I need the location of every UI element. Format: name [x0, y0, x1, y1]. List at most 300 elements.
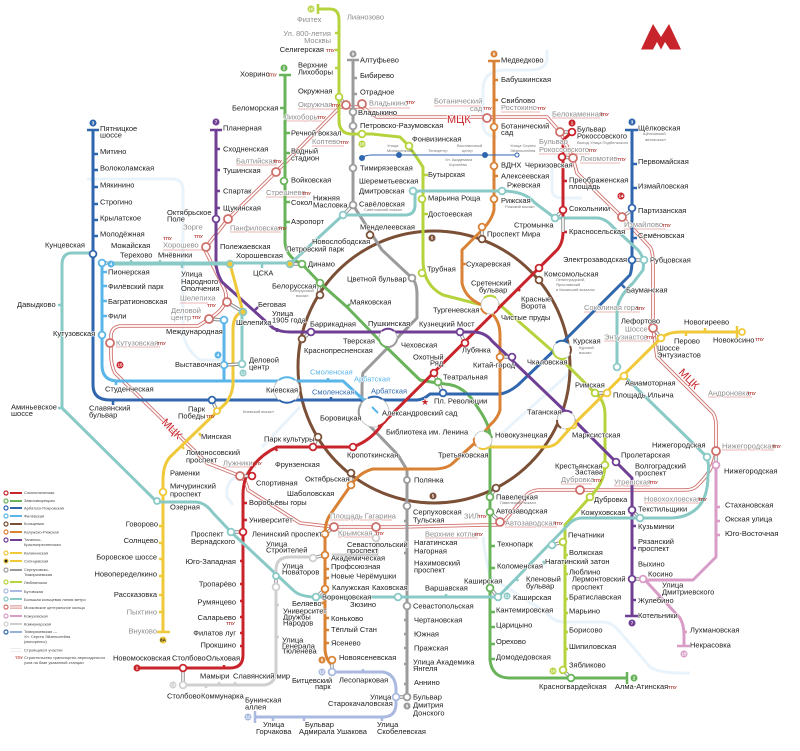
station labels left aligned: Бутырская	[428, 170, 465, 179]
station labels left aligned: Кантемировская	[496, 606, 553, 614]
line number bullets: 1	[571, 120, 574, 126]
station labels left aligned: Серпуховская	[413, 508, 462, 516]
station labels left aligned: Октябрьская	[305, 474, 350, 484]
station labels left aligned: Проспект Мира	[487, 230, 541, 238]
station labels left aligned: Столбово	[172, 654, 206, 662]
right aligned station labels: Говорово	[126, 520, 158, 528]
line number bullets: 11	[505, 594, 510, 598]
planned and MCC grey labels: Соколиная гора	[584, 303, 640, 312]
planned and MCC grey labels: Внуково	[128, 626, 157, 636]
station labels left aligned: ЦСКА	[253, 268, 273, 278]
planned and MCC grey labels	[116, 12, 776, 636]
station labels left aligned: бульвар	[479, 286, 507, 294]
station labels left aligned: Китай-город	[473, 360, 516, 370]
station labels left aligned: Комсомольская	[544, 270, 599, 278]
station labels left aligned: Свиблово	[501, 96, 535, 105]
station labels left aligned: Люблино	[569, 568, 600, 576]
interchange connectors	[102, 97, 716, 697]
legend: Солнцевская	[24, 558, 48, 564]
station labels left aligned: сад	[501, 128, 514, 137]
planned and MCC grey labels: Рокоссовского	[539, 145, 589, 154]
TPU transfer hub markers: ТПУ	[483, 106, 492, 111]
TPU transfer hub markers: ТПУ	[268, 72, 277, 78]
line number bullets: 4	[217, 352, 220, 358]
station labels left aligned: Полежаевская	[220, 242, 271, 251]
small station notes: railway terminals and monorail stops: Ленинградский,	[556, 277, 585, 282]
station labels left aligned: Ховрино	[240, 70, 270, 78]
line 10: Lyublinsko-Dmitrovskaya	[318, 4, 605, 670]
TPU transfer hub markers: ТПУ	[253, 461, 262, 466]
station labels left aligned: Савёловская	[359, 200, 405, 208]
station labels left aligned: Каширская	[513, 593, 551, 602]
station labels left aligned: Лухмановская	[690, 626, 739, 634]
station labels left aligned: Кунцевская	[45, 240, 85, 250]
station labels left aligned: Победы	[178, 412, 206, 420]
planned and MCC grey labels: Новохохловская	[644, 494, 701, 504]
line number bullets: 14	[618, 194, 624, 198]
TPU transfer hub markers: ТПУ	[747, 391, 756, 396]
station labels left aligned: Дмитриевского	[662, 588, 714, 596]
station labels left aligned: Университет	[249, 516, 293, 524]
line 11: Big Circle Line	[58, 191, 709, 600]
station labels left aligned: Волгоградский	[635, 462, 686, 470]
planned and MCC grey labels: Коптево	[312, 137, 340, 146]
station labels left aligned: Ольховая	[206, 654, 240, 662]
legend: Строительство транспортно-пересадочного	[24, 655, 106, 660]
station labels left aligned: Генерала	[282, 642, 316, 650]
station labels left aligned: Пражская	[414, 644, 448, 652]
line number bullets: 7	[215, 120, 218, 124]
station labels left aligned: Коломенская	[497, 562, 543, 570]
station labels left aligned: Красные	[521, 294, 551, 304]
station labels left aligned: Новоясеневская	[339, 653, 396, 662]
station labels left aligned: Щёлковская	[638, 124, 680, 132]
station labels left aligned: Киевская	[266, 386, 298, 394]
line number bullets: 6	[493, 52, 496, 56]
station labels left aligned: Зябликово	[569, 660, 606, 670]
legend: Люблинская	[24, 580, 47, 585]
station labels left aligned: Маяковская	[350, 298, 391, 306]
station labels left aligned: аллея	[245, 702, 266, 712]
station labels left aligned: Озерная	[170, 502, 200, 512]
line number bullets: 15	[681, 652, 687, 656]
station labels left aligned: Сухаревская	[466, 260, 511, 268]
station labels left aligned: центр	[249, 362, 269, 372]
station labels left aligned: Измайловская	[638, 182, 688, 190]
planned and MCC grey labels: Кутузовская	[116, 338, 158, 348]
line 9: Serpukhovsko-Timiryazevskaya	[347, 60, 417, 697]
planned and MCC grey labels: Бульвар	[539, 137, 568, 146]
planned and MCC grey labels: Лихоборы	[284, 112, 319, 122]
station labels left aligned: Сокольники	[569, 204, 610, 213]
station labels left aligned: Жулебино	[638, 596, 674, 605]
station labels left aligned: Нахимовский	[414, 558, 460, 568]
station labels left aligned: Улица	[370, 692, 392, 702]
station labels left aligned: Улица	[282, 636, 304, 644]
station labels left aligned: Деловой	[249, 356, 279, 364]
station labels left aligned: Лефортово	[621, 316, 660, 326]
station labels left aligned: Нижняя	[313, 194, 340, 202]
station labels left aligned: Кузьминки	[638, 522, 674, 531]
station labels left aligned: Тёплый Стан	[331, 625, 377, 634]
station labels left aligned: Войковская	[291, 176, 331, 184]
station labels left aligned: Донского	[413, 708, 445, 718]
station labels left aligned: Каширская	[464, 576, 502, 586]
line 3: Arbatsko-Pokrovskaya	[87, 130, 638, 405]
station labels left aligned: Верхние	[298, 60, 328, 70]
station labels left aligned: Окская улица	[725, 514, 773, 524]
station labels left aligned: Нагатинский затон	[545, 557, 610, 566]
legend: (монорельс)	[24, 639, 47, 644]
planned and MCC grey labels: Панфиловская	[230, 224, 282, 232]
station labels left aligned: Можайская	[111, 241, 150, 250]
station labels left aligned: Бибирево	[360, 71, 394, 80]
station labels left aligned: Шоссе	[657, 344, 680, 352]
station labels left aligned: Тульская	[413, 516, 444, 524]
station labels left aligned: Раменки	[170, 468, 200, 478]
station labels left aligned: Кропоткинская	[347, 450, 398, 460]
TPU transfer hub markers: ТПУ	[755, 337, 764, 342]
line 2: Zamoskvoretskaya	[279, 75, 627, 684]
planned and MCC grey labels: Энтузиастов	[604, 332, 648, 342]
small station notes: railway terminals and monorail stops: Киевский вокзал	[243, 409, 274, 414]
station labels left aligned: Беляево	[292, 599, 322, 608]
TPU transfer hub markers: ТПУ	[600, 112, 609, 117]
station labels left aligned: Владыкино	[358, 108, 397, 117]
station labels left aligned: Скобелевская	[377, 727, 426, 736]
right aligned station labels: Филатов луг	[193, 628, 236, 638]
station labels left aligned: Спортивная	[256, 478, 298, 488]
station labels left aligned: Чертановская	[414, 616, 462, 624]
station labels left aligned: Фонвизинская	[412, 134, 461, 144]
right aligned station labels	[94, 45, 324, 650]
small station notes: railway terminals and monorail stops: вокзал	[296, 293, 309, 298]
station labels left aligned: Дружбы	[283, 612, 311, 622]
legend: Кожуховская	[24, 614, 48, 618]
station labels left aligned: бульвар	[526, 582, 554, 590]
station labels left aligned: Полянка	[414, 476, 444, 484]
legend: ТПУ	[15, 655, 23, 660]
station labels left aligned: Славянский	[89, 404, 130, 412]
line 8A: Solntsevskaya	[156, 264, 243, 632]
TPU transfer hub markers: ТПУ	[478, 514, 487, 519]
planned and MCC grey labels: Шелепиха	[180, 294, 216, 302]
station labels left aligned: Бульвар	[413, 692, 442, 702]
MCC line lettering: МЦК	[159, 417, 185, 442]
station labels left aligned: Мнёвники	[158, 250, 192, 260]
TPU transfer hub markers: ТПУ	[537, 106, 546, 111]
station labels left aligned: Шаболовская	[287, 489, 334, 498]
TPU transfer hub markers: ТПУ	[317, 115, 326, 120]
station labels left aligned: Новокузнецкая	[495, 430, 548, 440]
small station notes: railway terminals and monorail stops: Выставочный	[457, 143, 482, 148]
TPU transfer hub markers: ТПУ	[192, 315, 201, 320]
TPU transfer hub markers	[157, 48, 781, 690]
line number bullets: 10	[308, 6, 314, 12]
station labels left aligned: Марьина Роща	[428, 194, 481, 202]
station labels left aligned: Волжская	[569, 548, 603, 557]
station labels left aligned: Выхино	[638, 560, 665, 568]
TPU transfer hub markers: ТПУ	[226, 621, 235, 626]
station labels left aligned: Нагорная	[414, 546, 447, 556]
station labels left aligned: Минская	[201, 432, 231, 441]
station labels left aligned: Пл. Революции	[434, 396, 487, 406]
small station notes: railway terminals and monorail stops	[243, 131, 666, 505]
MCC line lettering: МЦК	[447, 114, 471, 126]
station labels left aligned: Петровский парк	[286, 244, 345, 254]
station labels left aligned: Рокоссовского	[577, 132, 627, 140]
station labels left aligned: Красносельская	[569, 227, 625, 236]
station labels left aligned: Новаторов	[282, 568, 319, 576]
planned and MCC grey labels: Хорошево	[163, 240, 199, 250]
station labels left aligned: Вернадского	[191, 537, 235, 546]
station labels left aligned: Фили	[108, 312, 126, 320]
planned construction corridors	[87, 50, 690, 673]
station labels left aligned: площадь	[569, 182, 600, 191]
line number bullets: 9	[406, 704, 409, 708]
station labels left aligned: Народов	[283, 618, 313, 628]
TPU transfer hub markers: ТПУ	[194, 234, 203, 239]
planned and MCC grey labels: Лужники	[223, 458, 253, 468]
planned and MCC grey labels: Зорге	[183, 222, 203, 232]
line number bullets: 3	[92, 120, 95, 126]
small station notes: railway terminals and monorail stops: Белорусский	[290, 288, 314, 293]
station labels left aligned: Текстильщики	[638, 504, 687, 514]
planned and MCC grey labels: Деловой	[171, 306, 201, 315]
TPU transfer hub markers: ТПУ	[554, 521, 563, 526]
station labels left aligned: Отрадное	[360, 88, 394, 96]
station labels left aligned: Горчакова	[256, 727, 292, 736]
station labels left aligned: Ржевская	[507, 180, 541, 190]
small station notes: railway terminals and monorail stops: Павелецкий вокзал	[500, 500, 537, 505]
planned and MCC grey labels: Ботанический	[434, 96, 482, 106]
small station notes: railway terminals and monorail stops: Королёва	[449, 162, 468, 167]
station labels left aligned: Ломоносовский	[186, 448, 240, 457]
station labels left aligned: Старокачаловская	[328, 699, 393, 708]
line 13: Kommunarskaya	[183, 538, 377, 688]
legend: Арбатско-Покровская	[24, 506, 64, 510]
station labels left aligned: Сокол	[291, 198, 312, 207]
station labels left aligned: Царицыно	[496, 620, 532, 630]
legend: Большая кольцевая линия метро	[24, 597, 86, 602]
station labels left aligned: Орехово	[496, 637, 526, 646]
station labels left aligned: Пролетарская	[621, 450, 670, 460]
station labels left aligned: Площадь Ильича	[613, 390, 675, 400]
station labels left aligned: Динамо	[308, 260, 335, 268]
station labels left aligned: Тушинская	[223, 166, 261, 175]
station labels left aligned: Бунинская	[245, 696, 281, 704]
station labels left aligned: Печатники	[568, 530, 604, 540]
station labels left aligned: Пионерская	[108, 268, 150, 276]
legend: Ул. Сергея Эйзенштейна	[24, 634, 71, 639]
station labels left aligned: Терехово	[120, 250, 152, 260]
station labels left aligned: Щукинская	[223, 204, 261, 212]
station labels left aligned: Цветной бульвар	[347, 274, 407, 284]
station labels left aligned: Улица	[266, 540, 288, 548]
line number bullets: 5	[432, 494, 435, 498]
TPU transfer hub markers: ТПУ	[636, 306, 645, 311]
station labels left aligned: Марьино	[569, 606, 600, 616]
legend	[4, 490, 106, 665]
station labels left aligned: Севастопольская	[413, 602, 474, 610]
station labels left aligned: Молодёжная	[100, 230, 145, 238]
line number bullets: 2	[633, 676, 636, 680]
legend: Московское центральное кольцо	[24, 605, 86, 610]
station labels left aligned: Бульвар	[305, 720, 334, 729]
small station notes: railway terminals and monorail stops: центр	[462, 148, 474, 153]
station labels left aligned: Нагатинская	[414, 538, 457, 547]
legend: Филёвская	[24, 514, 44, 518]
planned and MCC grey labels: ЗИЛ	[464, 512, 479, 520]
legend: Краснопресненская	[24, 542, 61, 547]
station labels left aligned: Столбово	[167, 692, 201, 700]
line 4: Filyovskaya	[102, 263, 377, 412]
station labels left aligned: Новогиреево	[684, 318, 729, 326]
small station notes: railway terminals and monorail stops: Щёлковский	[643, 131, 666, 136]
station labels left aligned: Лесопарковая	[339, 676, 388, 684]
station labels left aligned: Дубровка	[594, 495, 628, 504]
right aligned station labels: Саларьево	[197, 613, 236, 622]
station labels left aligned: Новомосковская	[113, 654, 171, 662]
planned and MCC grey labels: Дубровка	[561, 475, 595, 484]
line number bullets	[90, 6, 688, 720]
legend: Кольцевая	[24, 521, 44, 526]
TPU transfer hub markers: ТПУ	[157, 341, 166, 346]
TPU transfer hub markers: ТПУ	[474, 532, 483, 537]
planned and MCC grey labels: центр	[171, 313, 191, 322]
station labels left aligned: Калужская	[332, 583, 369, 592]
line number bullets: 10	[550, 668, 556, 674]
station labels left aligned: Спартак	[223, 186, 252, 196]
planned and MCC grey labels: Стрешнево	[266, 188, 306, 197]
TPU transfer hub markers: ТПУ	[662, 223, 671, 228]
legend: Тимирязевская —	[24, 629, 57, 634]
station labels left aligned: Парк	[188, 404, 206, 414]
station labels left aligned: Ясенево	[331, 638, 361, 648]
legend: Серпуховско-	[24, 567, 50, 572]
station labels left aligned: Юго-Восточная	[725, 529, 778, 538]
station labels left aligned: Баррикадная	[310, 320, 356, 328]
station labels left aligned: Марксистская	[572, 430, 621, 440]
small station notes: railway terminals and monorail stops: Савёловский вокзал	[364, 207, 403, 212]
station labels left aligned: Улица	[282, 562, 304, 570]
station labels left aligned: Петровско-Разумовская	[360, 121, 443, 130]
TPU transfer hub markers: ТПУ	[593, 478, 602, 483]
legend: Тимирязевская	[24, 572, 52, 577]
TPU transfer hub markers: ТПУ	[326, 48, 335, 53]
station labels left aligned: Беговая	[258, 300, 286, 309]
blue line-coloured labels: Смоленская	[310, 368, 353, 376]
station labels left aligned: Менделеевская	[360, 222, 415, 232]
line number bullets: 13	[170, 682, 176, 688]
station labels left aligned: Нижегородская	[724, 466, 778, 476]
station labels left aligned: Тимирязевская	[360, 164, 413, 172]
station labels left aligned: проспект	[638, 544, 670, 553]
station labels left aligned: Трубная	[427, 264, 456, 274]
station labels left aligned: шоссе	[11, 409, 33, 418]
station labels left aligned: Ополчения	[181, 284, 220, 293]
planned and MCC grey labels: Крымская	[338, 528, 373, 538]
legend: Бутовская	[24, 589, 43, 594]
station labels left aligned: Чистые пруды	[501, 313, 550, 322]
station labels left aligned: проспект	[635, 468, 667, 478]
MCC line lettering	[159, 114, 702, 442]
station labels left aligned: Митино	[100, 147, 126, 156]
legend: Строящиеся участки	[24, 648, 62, 652]
station labels left aligned: Крылатское	[100, 214, 141, 222]
station labels left aligned: Коньково	[331, 614, 363, 623]
station labels left aligned: Электрозаводская	[563, 255, 627, 264]
station labels left aligned: Дмитровская	[359, 186, 405, 196]
station labels left aligned: Ленинский проспект	[252, 530, 323, 538]
legend: Замоскворецкая	[24, 498, 55, 503]
line number bullets: 9	[352, 52, 355, 56]
station labels left aligned: Сходненская	[223, 144, 268, 154]
station labels left aligned: стадион	[291, 154, 319, 162]
station labels left aligned: Павелецкая	[496, 492, 538, 502]
station labels left aligned: Бульвар	[577, 124, 606, 134]
line number bullets: 15	[117, 362, 123, 368]
MCC central ring railway	[111, 106, 774, 538]
station labels left aligned: проспект	[572, 582, 604, 592]
line number bullets: 8A	[160, 638, 167, 642]
station labels left aligned: 1905 года	[272, 316, 307, 324]
station labels left aligned: Партизанская	[638, 206, 686, 215]
line 6: Kaluzhsko-Rizhskaya	[321, 61, 500, 665]
right aligned station labels: Тропарёво	[199, 580, 236, 588]
legend: Сокольническая	[24, 490, 54, 495]
station labels left aligned: Зюзино	[350, 600, 376, 609]
station labels left aligned: Багратионовская	[108, 297, 167, 306]
station labels left aligned: Борисово	[569, 626, 603, 634]
line number bullets: 3	[631, 120, 634, 124]
station labels left aligned: Речной вокзал	[291, 128, 342, 138]
station labels left aligned: Стромынка	[514, 220, 554, 230]
TPU transfer hub markers: ТПУ	[646, 335, 655, 340]
planned and MCC grey labels: Локомотив	[580, 154, 617, 163]
station labels left aligned: Тверская	[343, 336, 375, 346]
line 1: Sokolnicheskaya	[137, 132, 572, 668]
right aligned station labels: Селигерская	[280, 45, 324, 54]
station labels left aligned: Новослободская	[312, 237, 370, 246]
TPU transfer hub markers: ТПУ	[207, 303, 216, 308]
planned and MCC grey labels: Балтийская	[236, 156, 277, 166]
TPU transfer hub markers: ТПУ	[772, 444, 781, 449]
station labels left aligned: Рязанский	[638, 537, 674, 546]
station labels left aligned: Коммунарка	[201, 692, 245, 700]
station labels left aligned: Филёвский парк	[108, 282, 164, 291]
small station notes: railway terminals and monorail stops: и Казанский вокзалы	[556, 287, 595, 292]
station labels left aligned: Котельники	[638, 611, 678, 620]
interchange station rings	[90, 94, 745, 700]
line 14: Nekrasovskaya	[645, 465, 720, 646]
TPU transfer hub markers: ТПУ	[278, 226, 287, 231]
station labels left aligned: Преображенская	[569, 176, 628, 184]
small station notes: railway terminals and monorail stops: Милашенкова	[387, 148, 414, 153]
small station notes: railway terminals and monorail stops: Рижский вокзал	[505, 204, 535, 209]
right aligned station labels: Боровское шоссе	[96, 552, 157, 562]
station labels left aligned: Застава	[575, 468, 604, 476]
station labels left aligned: Народного	[181, 277, 218, 286]
right aligned station labels: Новопеределкино	[94, 570, 157, 578]
station labels left aligned: Пятницкое	[100, 124, 137, 133]
station labels left aligned: Кузнецкий Мост	[419, 320, 475, 328]
line 12: Butovskaya	[255, 669, 396, 723]
planned and MCC grey labels: Владыкино	[369, 98, 408, 108]
line number bullets: 1	[136, 666, 139, 670]
station labels left aligned: Домодедовская	[496, 652, 551, 662]
TPU transfer hub markers: ТПУ	[206, 414, 215, 419]
